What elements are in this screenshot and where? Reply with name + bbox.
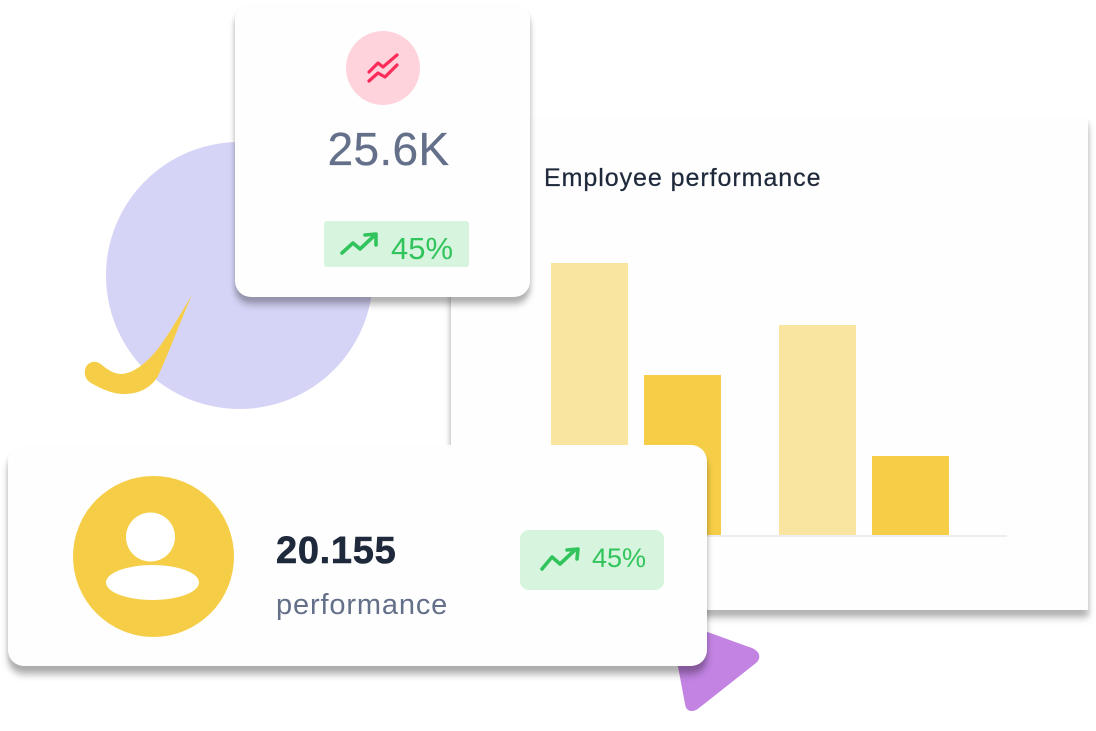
card: employee performance score [8,445,707,666]
purple triangle [678,632,760,711]
metric value: 25.6K [328,123,449,175]
badge value: 45% [592,543,646,573]
yellow swoosh shape [84,295,192,394]
icon: green trend arrow [540,547,580,571]
score label: performance [276,589,448,621]
badge value: 45% [391,231,453,266]
chart heading: Employee performance [544,164,821,192]
icon: user avatar [73,476,234,637]
growth badge [324,221,469,267]
score value: 20.155 [276,530,396,572]
icon: green trend arrow [340,232,378,255]
bar chart [551,263,1007,537]
panel: employee performance chart [451,118,1088,610]
decorative lavender circle [106,142,373,409]
growth badge [520,530,664,590]
card: 25.6K metric [235,3,530,297]
icon: red trend lines in pink circle [346,31,420,105]
